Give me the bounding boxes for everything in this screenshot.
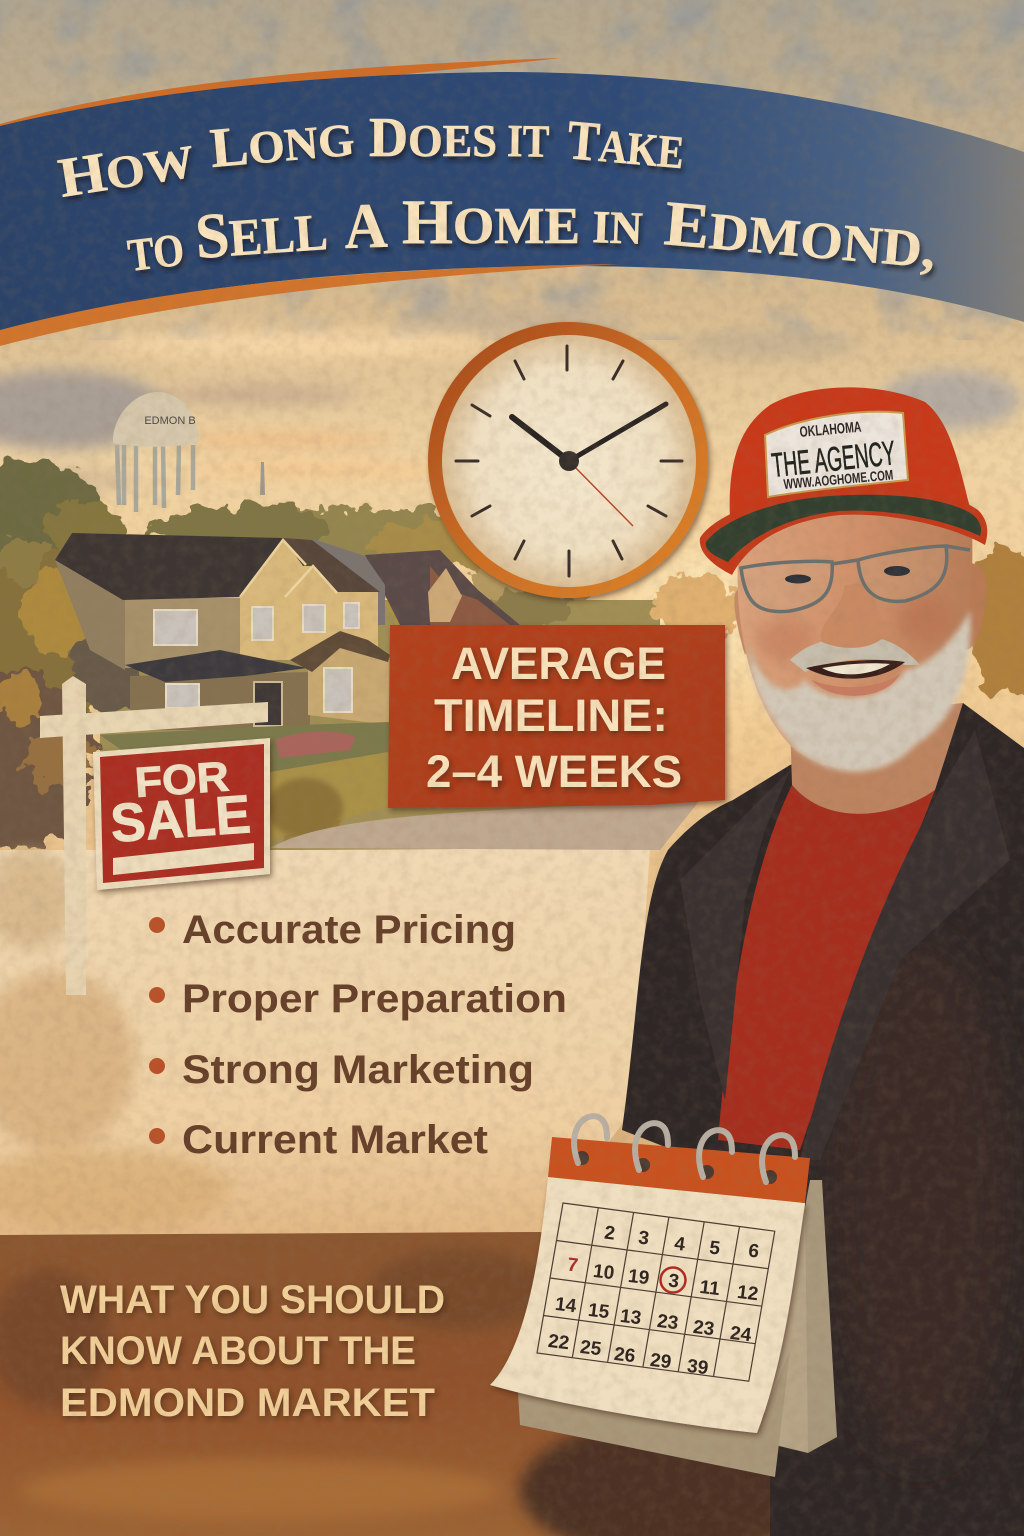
distant treeline [150,506,590,630]
sign board: SALE [109,784,252,854]
title line two: TO [125,223,187,281]
neighbour houses [365,550,520,625]
hat brim [700,488,987,575]
neck [790,703,963,814]
calendar numbers: 19 [627,1266,650,1289]
sign arm [40,702,268,738]
upper walls brick [125,598,240,668]
for sale sign [40,676,270,995]
hour hand [512,417,569,461]
average timeline box [388,625,725,808]
calendar numbers: 3 [667,1270,680,1293]
minute hand [569,404,666,461]
clock face [442,335,696,587]
title line one: DOES [369,107,497,169]
cheek colour [757,618,813,662]
clock [428,322,708,598]
title line two: A [343,190,388,262]
calendar numbers: 15 [587,1300,611,1323]
calendar numbers: 7 [566,1254,579,1277]
hat patch: THE AGENCY [770,434,897,485]
upper walls yellow [240,540,378,660]
main roof [55,533,283,600]
right ear [965,563,987,650]
eyes [785,574,811,584]
calendar numbers: 2 [603,1222,616,1245]
left ear [734,589,752,655]
lawn [270,752,388,840]
calendar numbers: 13 [619,1306,642,1329]
title line one: TAKE [565,109,687,181]
water tower [113,392,265,512]
jacket left lapel [680,770,790,1100]
banner [0,58,1024,346]
sign board [93,738,270,890]
calendar numbers: 4 [673,1233,687,1256]
calendar numbers: 10 [592,1261,615,1284]
calendar numbers: 12 [736,1282,759,1305]
title line two: SELL [193,192,330,272]
windows [154,603,359,712]
glasses [741,546,970,612]
trees and landscape [0,460,660,850]
calendar numbers: 29 [649,1350,672,1373]
shrub [267,778,343,838]
calendar numbers: 5 [708,1237,722,1260]
sign post [62,676,86,995]
hat patch: OKLAHOMA [799,419,862,441]
average timeline box: AVERAGE [451,638,666,689]
calendar numbers: 23 [692,1317,715,1340]
footer caption [60,1278,445,1425]
title line two [125,186,939,282]
title line one: HOW [54,127,198,210]
calendar numbers: 24 [729,1323,753,1346]
lower walls [130,672,310,730]
title line one: IT [507,115,550,167]
water tower: EDMON B [144,415,196,427]
calendar numbers: 26 [613,1344,636,1367]
bullet: proper preparation: Proper Preparation [182,977,567,1021]
banner bottom orange stroke [0,264,620,346]
average timeline box: 2–4 WEEKS [426,746,682,797]
teeth [822,663,890,674]
bullet list [149,908,567,1162]
road [270,800,700,850]
bullet: strong marketing: Strong Marketing [182,1048,534,1092]
sunset glow [520,430,880,810]
back page bottom [518,1350,790,1477]
title line two: IN [592,201,643,254]
nose [821,582,888,648]
calendar numbers: 11 [698,1277,721,1300]
calendar numbers: 23 [656,1311,679,1334]
mouth [806,660,905,679]
jacket right lapel [800,730,1010,1160]
jacket [622,703,1024,1536]
shirt [718,785,935,1150]
hat patch [765,412,908,497]
lower lip [812,674,900,696]
porch roofs [125,650,307,682]
lower panel [0,848,650,1235]
front page [490,1177,805,1433]
banner ribbon [0,72,1024,332]
calendar numbers: 39 [686,1356,709,1379]
left side wall [55,540,125,670]
house [55,533,390,840]
clock hub [559,451,579,471]
circled date [660,1268,686,1292]
back page middle [760,1200,808,1453]
calendar numbers: 6 [747,1240,760,1263]
footer caption: EDMOND MARKET [60,1381,435,1425]
footer caption: WHAT YOU SHOULD [60,1278,445,1322]
front door [254,682,282,726]
calendar numbers [547,1222,760,1379]
calendar rings [574,1116,795,1184]
sign board: FOR [133,753,230,806]
clock ring [428,322,708,598]
calendar header [548,1137,810,1203]
calendar numbers: 22 [547,1331,570,1354]
beard [748,610,971,772]
clock ticks [456,346,682,576]
banner top orange stroke [0,58,560,136]
average timeline box: TIMELINE: [434,690,668,741]
calendar grid [537,1203,775,1381]
side grey roof [310,538,385,625]
right side trees [655,545,1024,695]
ground mottling [0,1250,820,1536]
title line two: EDMOND, [662,187,939,282]
calendar [490,1116,837,1477]
hat patch: WWW.AOGHOME.COM [783,466,894,492]
top sky mottling [0,0,1024,340]
moustache [790,638,920,672]
hat crown [730,387,975,525]
calendar numbers: 14 [554,1294,578,1317]
calendar numbers: 25 [579,1337,603,1360]
bullet: current market: Current Market [182,1118,488,1162]
footer caption: KNOW ABOUT THE [60,1329,416,1373]
title line two: HOME [402,186,580,257]
bullet: accurate pricing: Accurate Pricing [182,908,516,952]
panel edge mottling [0,850,230,1230]
man [622,387,1024,1536]
ground band [0,1232,800,1536]
gable trim [240,540,337,597]
title line one: LONG [208,106,357,180]
right roof [283,538,380,592]
garden [100,722,390,782]
back page right [770,1180,837,1453]
jacket shading [830,940,1010,1460]
second hand [569,461,633,526]
head [738,510,972,769]
calendar numbers: 3 [637,1227,650,1250]
title line one [54,106,687,210]
sky clouds [0,308,1020,494]
